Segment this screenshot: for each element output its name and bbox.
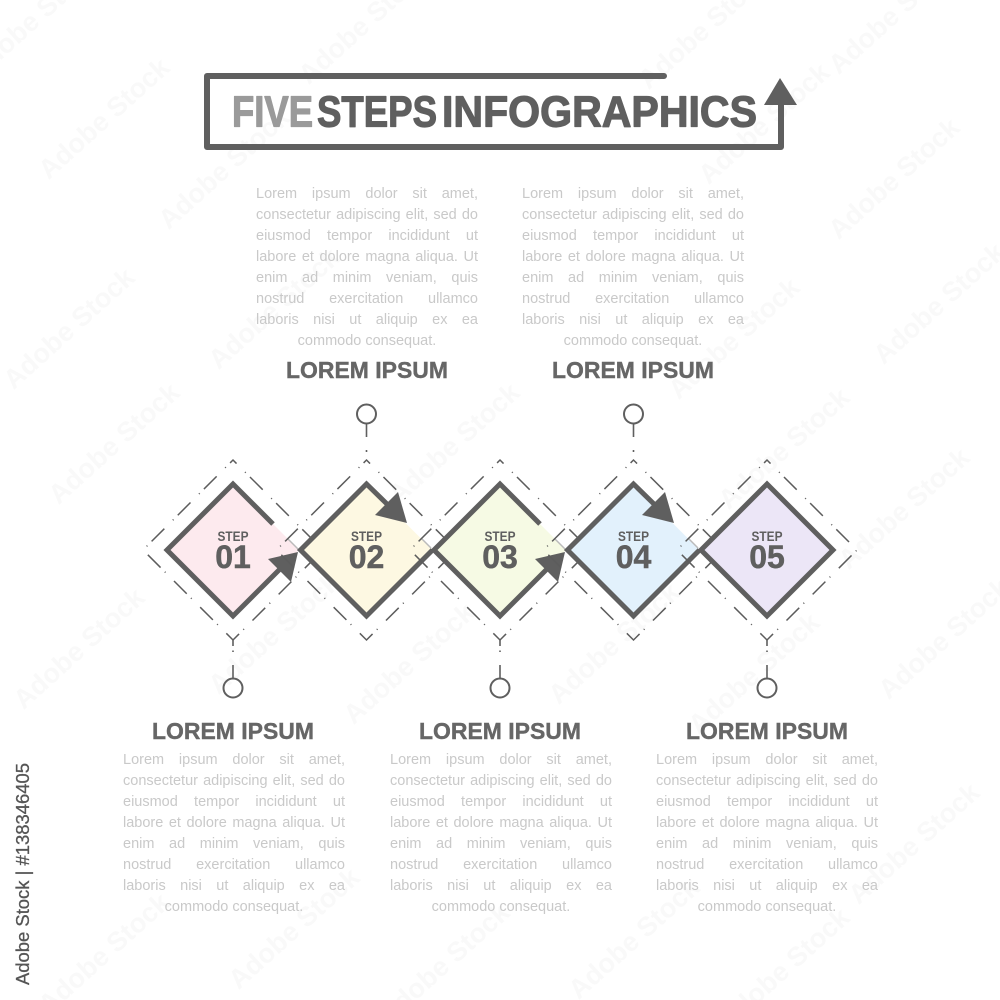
- title frame with arrow: [207, 76, 797, 147]
- watermark pattern: Adobe Stock: [0, 261, 141, 395]
- text block: bottom centre: eiusmod tempor incididunt ut: [390, 794, 612, 810]
- text block: bottom right: commodo consequat.: [698, 899, 836, 915]
- text block: bottom left: consectetur adipiscing elit, sed do: [123, 773, 345, 789]
- step 5 diamond: 05: [749, 539, 785, 575]
- text block: bottom right: consectetur adipiscing elit, sed do: [656, 773, 878, 789]
- text block: top right: labore et dolore magna aliqua. Ut: [522, 249, 744, 265]
- step 5 diamond: STEP: [752, 529, 782, 544]
- text block: top left: commodo consequat.: [298, 333, 436, 349]
- text block: bottom right: nostrud exercitation ullamco: [656, 857, 878, 873]
- text block: bottom centre: nostrud exercitation ullamco: [390, 857, 612, 873]
- watermark pattern: Adobe Stock: [203, 241, 346, 375]
- text block: top left: enim ad minim veniam, quis: [256, 270, 478, 286]
- text block: top right: eiusmod tempor incididunt ut: [522, 228, 744, 244]
- text block: top left: laboris nisi ut aliquip ex ea: [256, 312, 478, 328]
- text block: bottom left: labore et dolore magna aliqua. Ut: [123, 815, 345, 831]
- watermark pattern: Adobe Stock: [713, 381, 856, 515]
- step 5 diamond: [677, 460, 857, 640]
- step 2 diamond: [276, 460, 456, 640]
- watermark pattern: Adobe Stock: [683, 606, 826, 740]
- text block: bottom left: commodo consequat.: [165, 899, 303, 915]
- step 1 diamond: [143, 460, 323, 640]
- step 4 diamond: [544, 460, 724, 640]
- watermark pattern: Adobe Stock: [383, 376, 526, 510]
- title: FIVE: [232, 88, 313, 136]
- watermark pattern: Adobe Stock: [663, 271, 806, 405]
- text block: top right: nostrud exercitation ullamco: [522, 291, 744, 307]
- text block: top right: consectetur adipiscing elit, sed do: [522, 207, 744, 223]
- text block: top right: Lorem ipsum dolor sit amet,: [522, 186, 744, 202]
- watermark pattern: Adobe Stock: [543, 576, 686, 710]
- text block: bottom right: [656, 752, 878, 915]
- text block: bottom left: Lorem ipsum dolor sit amet,: [123, 752, 345, 768]
- step 4 diamond: STEP: [618, 529, 649, 544]
- heading: top left label: LOREM IPSUM: [286, 357, 448, 383]
- step 1 diamond: 01: [215, 539, 251, 575]
- watermark pattern: Adobe Stock: [833, 441, 976, 575]
- step 4 diamond: 04: [616, 539, 652, 575]
- text block: bottom right: laboris nisi ut aliquip ex ea: [656, 878, 878, 894]
- heading: bottom right label: LOREM IPSUM: [686, 718, 848, 744]
- watermark pattern: Adobe Stock: [203, 566, 346, 700]
- text block: bottom centre: laboris nisi ut aliquip ex ea: [390, 878, 612, 894]
- connector: step 5 to bottom node: [758, 640, 776, 698]
- watermark pattern: Adobe Stock: [338, 596, 481, 730]
- text block: bottom right: enim ad minim veniam, quis: [656, 836, 878, 852]
- title: [232, 88, 757, 136]
- text block: bottom left: eiusmod tempor incididunt ut: [123, 794, 345, 810]
- connector: step 2 to top node: [357, 404, 376, 452]
- text block: bottom left: [123, 752, 345, 915]
- watermark pattern: Adobe Stock: [8, 581, 151, 715]
- step 1 diamond: STEP: [218, 529, 248, 544]
- text block: bottom right: Lorem ipsum dolor sit amet,: [656, 752, 878, 768]
- connector: step 4 to top node: [624, 404, 643, 452]
- stock credit: Adobe Stock | #138346405: [13, 763, 33, 985]
- watermark pattern: Adobe Stock: [153, 101, 296, 235]
- text block: bottom centre: consectetur adipiscing elit, sed do: [390, 773, 612, 789]
- connector: step 3 to bottom node: [490, 640, 510, 698]
- connector: step 1 to bottom node: [224, 640, 242, 698]
- text block: bottom left: laboris nisi ut aliquip ex ea: [123, 878, 345, 894]
- watermark pattern: Adobe Stock: [43, 376, 186, 510]
- heading: bottom left label: LOREM IPSUM: [152, 718, 314, 744]
- step 3 diamond: 03: [482, 539, 518, 575]
- watermark pattern: Adobe Stock: [33, 51, 176, 185]
- text block: top left: Lorem ipsum dolor sit amet,: [256, 186, 478, 202]
- heading: top right label: LOREM IPSUM: [552, 357, 714, 383]
- watermark pattern: Adobe Stock: [823, 111, 966, 245]
- text block: top left: consectetur adipiscing elit, sed do: [256, 207, 478, 223]
- text block: top left: [256, 186, 478, 349]
- step 2 diamond: STEP: [351, 529, 382, 544]
- step 3 diamond: STEP: [484, 529, 516, 544]
- watermark pattern: Adobe Stock: [843, 776, 986, 910]
- text block: bottom right: eiusmod tempor incididunt ut: [656, 794, 878, 810]
- text block: top right: laboris nisi ut aliquip ex ea: [522, 312, 744, 328]
- watermark pattern: Adobe Stock: [693, 56, 836, 190]
- text block: top left: labore et dolore magna aliqua. Ut: [256, 249, 478, 265]
- text block: bottom centre: labore et dolore magna aliqua. Ut: [390, 815, 612, 831]
- text block: bottom left: enim ad minim veniam, quis: [123, 836, 345, 852]
- step 2 diamond: 02: [349, 539, 384, 575]
- text block: top right: enim ad minim veniam, quis: [522, 270, 744, 286]
- step 3 diamond: [410, 460, 590, 640]
- watermark pattern: Adobe Stock: [223, 861, 366, 995]
- text block: top right: commodo consequat.: [564, 333, 702, 349]
- text block: bottom centre: [390, 752, 612, 915]
- title: INFOGRAPHICS: [442, 88, 757, 136]
- text block: bottom centre: enim ad minim veniam, quis: [390, 836, 612, 852]
- text block: bottom left: nostrud exercitation ullamco: [123, 857, 345, 873]
- text block: bottom centre: Lorem ipsum dolor sit amet,: [390, 752, 612, 768]
- heading: bottom centre label: LOREM IPSUM: [419, 718, 581, 744]
- title: STEPS: [317, 88, 437, 136]
- text block: top right: [522, 186, 744, 349]
- text block: bottom right: labore et dolore magna aliqua. Ut: [656, 815, 878, 831]
- text block: bottom centre: commodo consequat.: [432, 899, 570, 915]
- text block: top left: nostrud exercitation ullamco: [256, 291, 478, 307]
- text block: top left: eiusmod tempor incididunt ut: [256, 228, 478, 244]
